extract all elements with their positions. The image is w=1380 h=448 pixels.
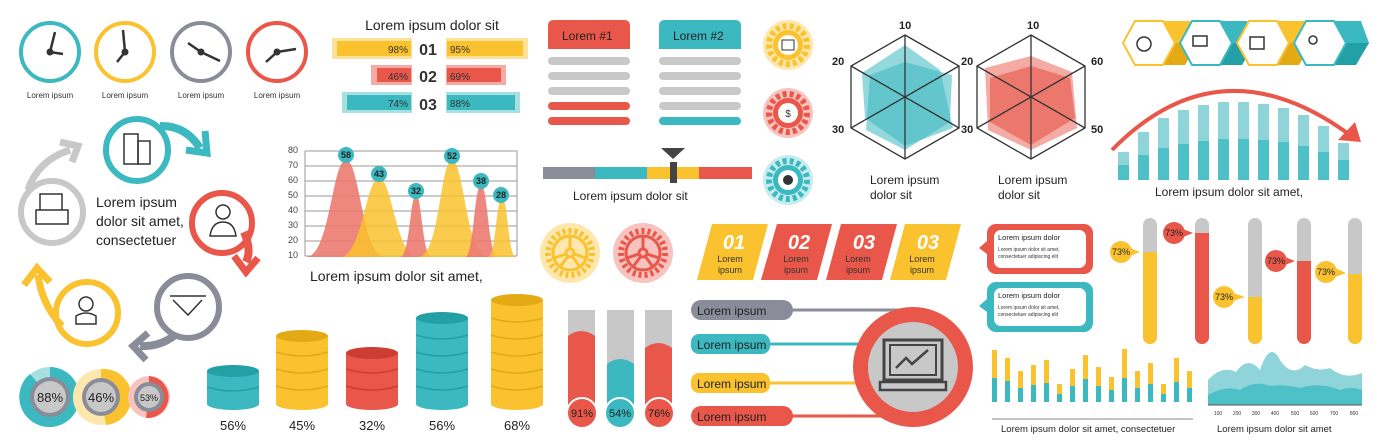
comparison bars: 98% [388, 45, 408, 56]
big gears [540, 223, 673, 283]
speech bubbles: Lorem ipsum dolor sit amet, [998, 305, 1060, 311]
clock 4: Lorem ipsum [254, 91, 300, 100]
step: woman (yellow) [24, 268, 118, 344]
stacked bar chart: Lorem ipsum dolor sit amet, consectetuer [1001, 424, 1175, 435]
speech bubbles: Lorem ipsum dolor [998, 291, 1061, 300]
radar chart 2 [977, 20, 1103, 202]
cycle text: Lorem ipsum [96, 194, 177, 210]
cycle diagram [21, 119, 258, 360]
numbered tags: Lorem [909, 254, 935, 264]
gear icons: $ [785, 109, 791, 120]
slider bar [543, 148, 752, 203]
numbered tags [697, 224, 961, 280]
clock 3 [172, 23, 230, 100]
radar chart 1: 20 [832, 56, 844, 68]
speech bubbles: Lorem ipsum dolor sit amet, [998, 247, 1060, 253]
radar chart 1: 30 [961, 124, 973, 136]
numbered tags: ipsum [846, 265, 870, 275]
clock 2 [96, 23, 154, 100]
radar chart 1: dolor sit [870, 188, 913, 202]
peak chart [288, 145, 517, 284]
laptop hub: Lorem ipsum [697, 377, 766, 391]
clock 3: Lorem ipsum [178, 91, 224, 100]
peak chart: 70 [288, 160, 298, 170]
numbered tags: Lorem [783, 254, 809, 264]
vertical progress bars: 73% [1215, 292, 1233, 302]
peak chart: 30 [288, 220, 298, 230]
radar chart 1 [832, 20, 973, 202]
step: document (light grey) [21, 142, 83, 243]
numbered tags: 01 [723, 232, 745, 254]
vertical progress bars: 73% [1112, 247, 1130, 257]
radar chart 2: 60 [1091, 56, 1103, 68]
area chart: 800 [1350, 411, 1358, 417]
hexagon step icons [1123, 21, 1369, 65]
radar chart 1: 20 [961, 56, 973, 68]
cylinder chart [207, 294, 543, 433]
cycle text: dolor sit amet, [96, 213, 184, 229]
stacked bar chart [992, 349, 1193, 435]
numbered tags: 03 [917, 232, 939, 254]
peak chart: 52 [447, 151, 457, 161]
comparison bars: 01 [419, 42, 437, 59]
list cards: Lorem #1 [562, 29, 613, 43]
radar chart 1: 30 [832, 124, 844, 136]
area chart: 200 [1233, 411, 1241, 417]
thermometer bars: 91% [571, 408, 593, 420]
radar chart 1: Lorem ipsum [870, 173, 939, 187]
peak chart: 60 [288, 175, 298, 185]
donut charts [19, 367, 170, 427]
clock 2: Lorem ipsum [102, 91, 148, 100]
speech bubbles: Lorem ipsum dolor [998, 233, 1061, 242]
comparison bars: 46% [388, 72, 408, 83]
laptop hub: Lorem ipsum [697, 304, 766, 318]
arc bar chart [1112, 91, 1361, 199]
comparison bars [332, 17, 528, 114]
clocks row [21, 23, 306, 100]
thermometer bars: 54% [609, 408, 631, 420]
peak chart: 43 [374, 169, 384, 179]
cylinder chart: 45% [289, 418, 315, 433]
peak chart: 28 [496, 190, 506, 200]
comparison bars: Lorem ipsum dolor sit [365, 17, 499, 33]
speech bubbles [979, 224, 1093, 332]
speech bubbles: consectetuer adipiscing elit [998, 254, 1059, 260]
peak chart: 40 [288, 205, 298, 215]
area chart: 700 [1330, 411, 1338, 417]
clock 1 [21, 23, 79, 100]
slider bar: Lorem ipsum dolor sit [573, 189, 688, 203]
peak chart: 10 [288, 250, 298, 260]
area chart: 600 [1310, 411, 1318, 417]
cycle text: consectetuer [96, 232, 176, 248]
comparison bars: 95% [450, 45, 470, 56]
numbered tags: Lorem [845, 254, 871, 264]
area chart [1208, 352, 1362, 435]
peak chart: 58 [341, 150, 351, 160]
numbered tags: ipsum [784, 265, 808, 275]
peak chart: 32 [411, 186, 421, 196]
comparison bars: 03 [419, 97, 437, 114]
arc bar chart: Lorem ipsum dolor sit amet, [1155, 185, 1303, 199]
numbered tags: 03 [853, 232, 875, 254]
numbered tags: 02 [788, 232, 810, 254]
cylinder chart: 56% [429, 418, 455, 433]
step: person (red) [192, 193, 258, 272]
clock 4 [248, 23, 306, 100]
peak chart: 50 [288, 190, 298, 200]
gear icons [763, 20, 813, 205]
cylinder chart: 68% [504, 418, 530, 433]
thermometer bars [567, 310, 674, 428]
vertical progress bars: 73% [1317, 267, 1335, 277]
radar chart 2: Lorem ipsum [998, 173, 1067, 187]
cylinder chart: 32% [359, 418, 385, 433]
numbered tags: ipsum [718, 265, 742, 275]
numbered tags: Lorem [717, 254, 743, 264]
donut charts: 53% [140, 393, 158, 403]
donut charts: 88% [37, 390, 63, 405]
radar chart 2: 10 [1027, 20, 1039, 32]
comparison bars: 69% [450, 72, 470, 83]
vertical progress bars: 73% [1267, 256, 1285, 266]
area chart: 100 [1214, 411, 1222, 417]
thermometer bars: 76% [648, 408, 670, 420]
speech bubbles: consectetuer adipiscing elit [998, 312, 1059, 318]
list cards [548, 20, 741, 125]
step: handshake (grey) [133, 276, 219, 360]
comparison bars: 74% [388, 99, 408, 110]
donut charts: 46% [88, 390, 114, 405]
cylinder chart: 56% [220, 418, 246, 433]
radar chart 2: dolor sit [998, 188, 1041, 202]
clock 1: Lorem ipsum [27, 91, 73, 100]
comparison bars: 02 [419, 69, 437, 86]
vertical progress bars: 73% [1165, 228, 1183, 238]
vertical progress bars [1110, 218, 1362, 344]
area chart: Lorem ipsum dolor sit amet [1217, 424, 1332, 435]
numbered tags: ipsum [910, 265, 934, 275]
radar chart 1: 10 [899, 20, 911, 32]
comparison bars: 88% [450, 99, 470, 110]
peak chart: 38 [476, 176, 486, 186]
list cards: Lorem #2 [673, 29, 724, 43]
laptop hub: Lorem ipsum [697, 338, 766, 352]
peak chart: 20 [288, 235, 298, 245]
peak chart: 80 [288, 145, 298, 155]
peak chart: Lorem ipsum dolor sit amet, [310, 268, 483, 284]
step: building (teal) [106, 119, 207, 181]
laptop hub: Lorem ipsum [697, 410, 766, 424]
laptop hub [691, 300, 973, 427]
area chart: 500 [1291, 411, 1299, 417]
area chart: 300 [1252, 411, 1260, 417]
radar chart 2: 50 [1091, 124, 1103, 136]
area chart: 400 [1271, 411, 1279, 417]
